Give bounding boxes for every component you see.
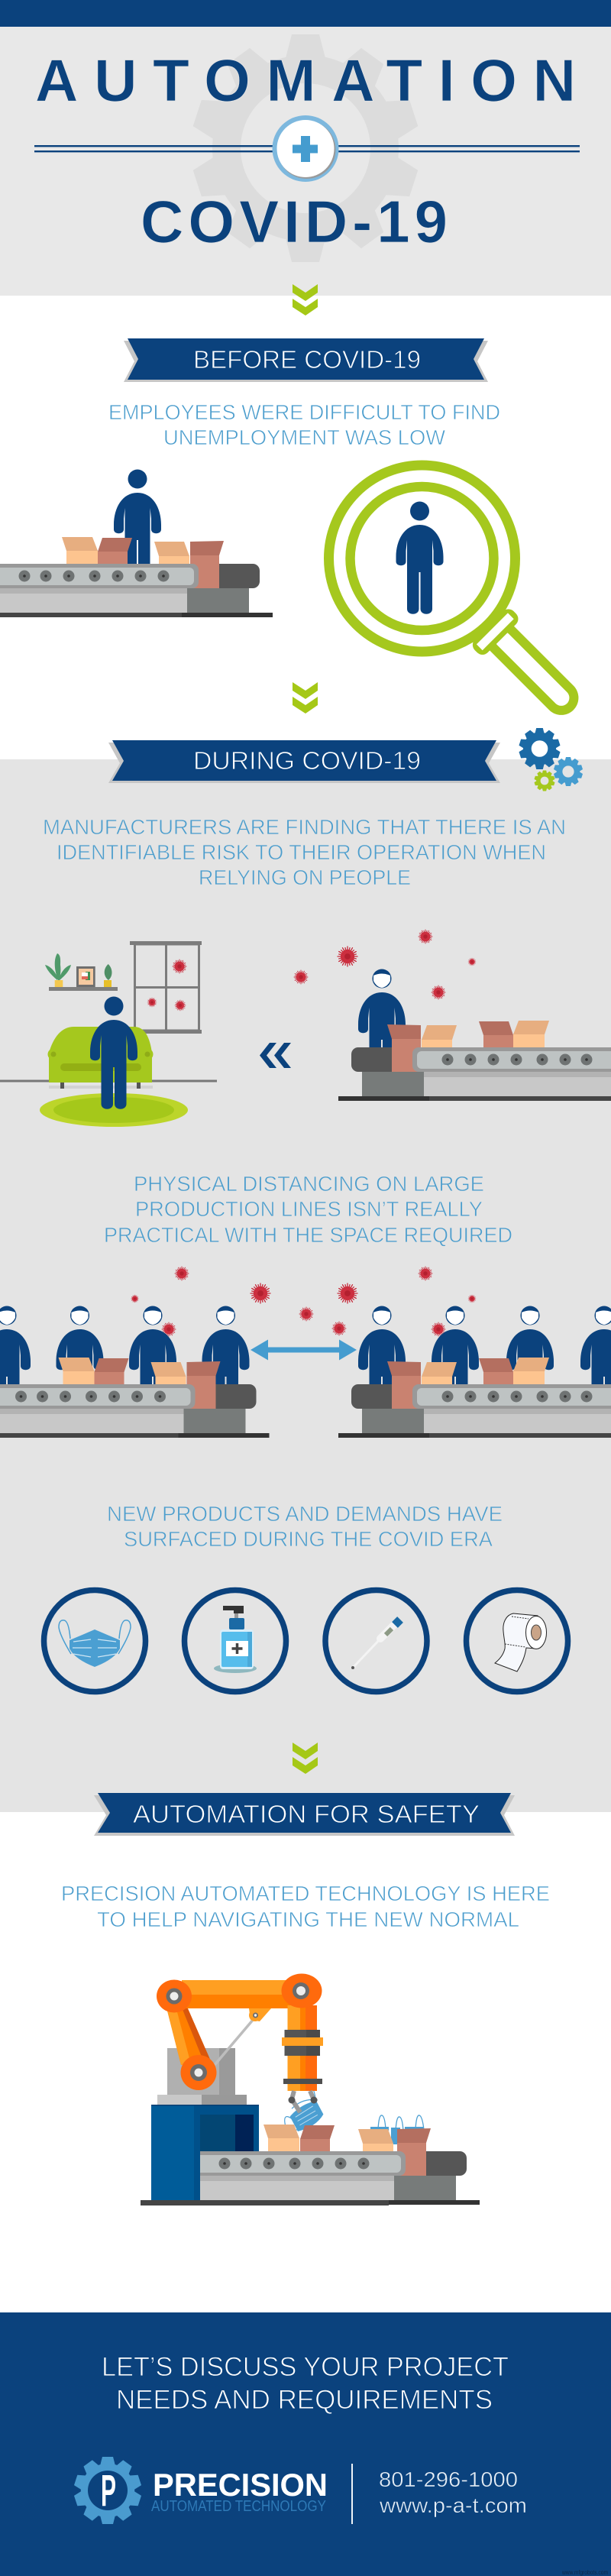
panel: during covid grey background [0, 759, 611, 1812]
text: physical distancing: PRODUCTION LINES ISN’T REALLY [135, 1197, 483, 1221]
logo: gear with P: P [101, 2466, 116, 2516]
arrow: chevrons 3 [293, 1743, 318, 1774]
text: employees were difficult to find: EMPLOYEES WERE DIFFICULT TO FIND [108, 400, 500, 424]
text: manufacturers risk: RELYING ON PEOPLE [199, 866, 411, 889]
icon: magnifying glass with person [328, 465, 580, 717]
illustration: right production line [338, 1267, 611, 1438]
arrow: double left [260, 1043, 291, 1068]
illustration: masked worker at conveyor with viruses [294, 930, 611, 1101]
text: employees were difficult to find: UNEMPLOYMENT WAS LOW [163, 426, 446, 449]
bracket [249, 2008, 271, 2021]
cabinet and column [157, 2048, 259, 2200]
banner: before covid-19 [124, 338, 488, 382]
lower arm [167, 2007, 212, 2065]
window with viruses [130, 941, 202, 1034]
divider [351, 2464, 353, 2524]
arrow: chevrons 2 [293, 682, 318, 714]
icon: face mask [44, 1591, 145, 1691]
packed masks [370, 2115, 424, 2144]
vertical arm [282, 2005, 323, 2091]
text: new products: NEW PRODUCTS AND DEMANDS HAVE [107, 1502, 503, 1526]
illustration: worker at conveyor [0, 469, 273, 617]
logo: gear with P [73, 2457, 142, 2524]
arrow: chevrons 1 [293, 284, 318, 316]
rug [40, 1093, 188, 1127]
text: precision automated technology [61, 1882, 550, 1931]
sofa [47, 1027, 153, 1089]
text: new products [107, 1502, 503, 1551]
text: physical distancing: PHYSICAL DISTANCING ON LARGE [134, 1172, 484, 1196]
title: Covid-19: COVID-19 [141, 188, 448, 255]
banner: during covid-19 [108, 740, 500, 783]
text: physical distancing: PRACTICAL WITH THE SPACE REQUIRED [104, 1223, 512, 1247]
contact details: www.p-a-t.com [379, 2493, 527, 2517]
boxes [263, 2125, 299, 2151]
icon: toilet paper [466, 1591, 568, 1691]
panel: header [0, 0, 611, 296]
banner: automation for safety: AUTOMATION FOR SAFETY [133, 1800, 480, 1828]
conveyor [161, 2128, 480, 2205]
text: call to action: NEEDS AND REQUIREMENTS [116, 2385, 493, 2415]
illustration: left production line [0, 1267, 270, 1438]
text: call to action [102, 2352, 509, 2415]
text: new products: SURFACED DURING THE COVID ERA [124, 1527, 493, 1551]
text: call to action: LET’S DISCUSS YOUR PROJECT [102, 2352, 509, 2382]
joints [157, 1974, 322, 2090]
viruses between the lines [299, 1307, 346, 1335]
person at home [90, 996, 137, 1109]
banner: before covid-19: BEFORE COVID-19 [193, 345, 421, 374]
held mask [275, 2087, 328, 2137]
logo: wordmark: PRECISION [153, 2467, 328, 2503]
cabinet front and floor [141, 2105, 389, 2205]
icon: three gears [519, 728, 583, 791]
icon: thermometer [325, 1591, 427, 1691]
text: physical distancing [104, 1172, 512, 1247]
contact details [379, 2468, 527, 2517]
title: Automation: AUTOMATION [35, 47, 576, 114]
illustration: person at home [0, 941, 217, 1127]
gripper [289, 2091, 318, 2112]
illustration: robot arm packing masks [141, 1974, 480, 2205]
icon: plus badge [272, 115, 339, 182]
upper arm [182, 1980, 296, 2008]
strut [215, 2019, 254, 2065]
logo: wordmark: AUTOMATED TECHNOLOGY [151, 2498, 326, 2515]
contact details: 801-296-1000 [379, 2468, 518, 2491]
shelf with plants and picture [45, 953, 118, 991]
text: manufacturers risk: IDENTIFIABLE RISK TO THEIR OPERATION WHEN [57, 840, 546, 864]
panel: footer [0, 2312, 611, 2576]
floor line [0, 1080, 217, 1082]
arrow: distance double arrow [251, 1340, 357, 1360]
banner: automation for safety [94, 1793, 515, 1836]
text: employees were difficult to find [108, 400, 500, 449]
text: manufacturers risk [43, 815, 566, 889]
icon: background gear [191, 34, 420, 262]
text: manufacturers risk: MANUFACTURERS ARE FINDING THAT THERE IS AN [43, 815, 566, 839]
icon: sanitizer bottle [185, 1591, 286, 1691]
double rule [34, 145, 580, 152]
text: precision automated technology: TO HELP NAVIGATING THE NEW NORMAL [97, 1908, 519, 1931]
banner: during covid-19: DURING COVID-19 [193, 746, 421, 775]
text: precision automated technology: PRECISION AUTOMATED TECHNOLOGY IS HERE [61, 1882, 550, 1905]
